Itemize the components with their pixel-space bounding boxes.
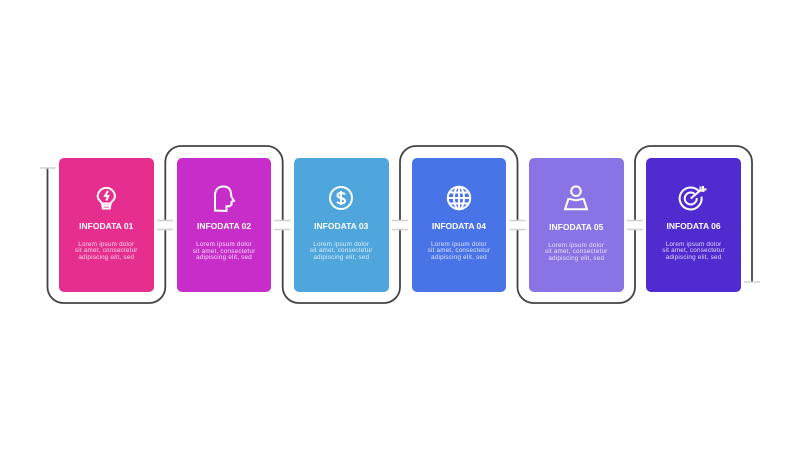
text block: Lorem ipsum dolor <box>431 241 487 248</box>
panel: infodata 01 <box>59 158 154 292</box>
text block: sit amet, consectetur <box>545 248 608 255</box>
text block: adipiscing elit, sed <box>666 254 721 261</box>
heading: INFODATA 05 <box>549 222 603 232</box>
heading: INFODATA 06 <box>666 221 721 231</box>
icon: target with arrow <box>678 186 707 210</box>
text block: Lorem ipsum dolor <box>666 241 721 248</box>
text block: adipiscing elit, sed <box>548 255 604 262</box>
panel: infodata 03 <box>294 158 388 292</box>
text block <box>193 241 256 261</box>
text block: sit amet, consectetur <box>428 247 490 254</box>
heading: INFODATA 01 <box>79 221 133 231</box>
icon: dollar coin <box>329 186 353 210</box>
text block <box>662 241 725 261</box>
text block: sit amet, consectetur <box>75 247 138 254</box>
text block: sit amet, consectetur <box>193 248 255 255</box>
icon: person on map <box>564 185 588 210</box>
panel: infodata 02 <box>177 158 271 292</box>
panel: infodata 05 <box>529 158 624 292</box>
text block: adipiscing elit, sed <box>78 254 134 261</box>
text block: Lorem ipsum dolor <box>313 241 369 248</box>
panel: infodata 04 <box>412 158 506 292</box>
icon: globe <box>446 186 472 210</box>
heading: INFODATA 03 <box>314 221 368 231</box>
text block: adipiscing elit, sed <box>431 254 487 261</box>
text block: adipiscing elit, sed <box>196 254 252 261</box>
text block: adipiscing elit, sed <box>313 254 369 261</box>
heading: INFODATA 04 <box>432 221 486 231</box>
text block <box>75 241 138 261</box>
text block: Lorem ipsum dolor <box>196 241 252 248</box>
panel: infodata 06 <box>646 158 741 292</box>
text block: Lorem ipsum dolor <box>78 241 134 248</box>
text block <box>545 242 608 262</box>
heading: INFODATA 02 <box>197 221 251 231</box>
text block <box>310 241 373 261</box>
text block: Lorem ipsum dolor <box>548 242 604 249</box>
text block: sit amet, consectetur <box>310 247 373 254</box>
text block <box>428 241 490 261</box>
text block: sit amet, consectetur <box>662 247 725 254</box>
icon: head profile <box>214 186 236 212</box>
icon: light bulb <box>96 186 116 210</box>
